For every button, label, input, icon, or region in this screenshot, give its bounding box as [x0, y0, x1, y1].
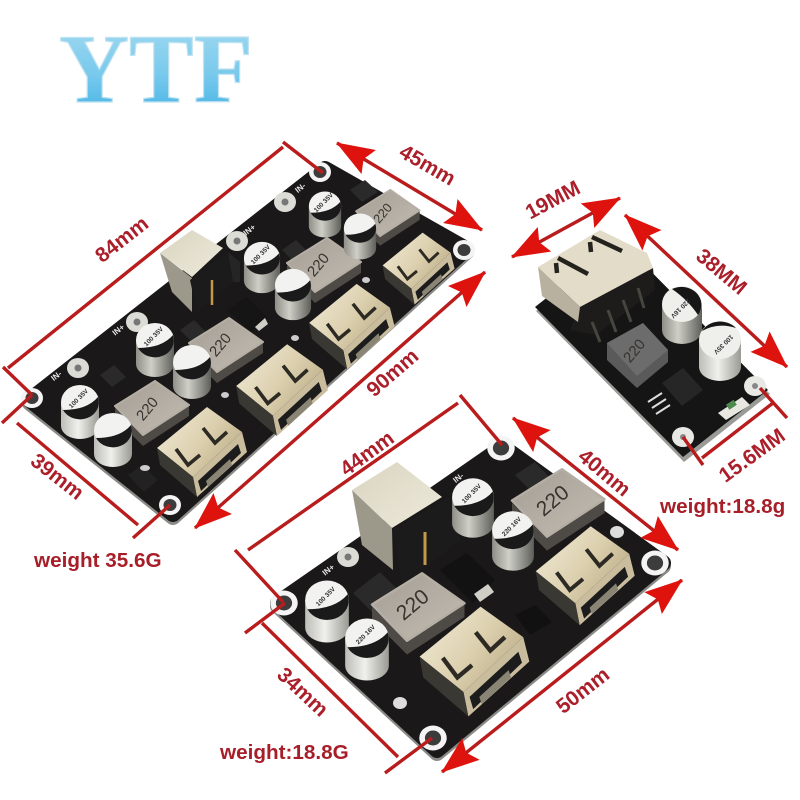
- capacitors: 100 35V: [461, 482, 483, 505]
- board: four-port 84x39 module: IN+: [242, 222, 257, 237]
- dimensions: 45mm arrow: 45mm: [395, 140, 459, 191]
- dimensions: 38MM arrow: 38MM: [691, 244, 751, 300]
- board: four-port 84x39 module: [21, 162, 475, 517]
- weight label: large board: weight 35.6G: [33, 549, 162, 572]
- capacitors: 220 16V: [501, 515, 523, 538]
- dimensions: 50mm arrow: 50mm: [552, 663, 614, 719]
- capacitors: 100 35V: [250, 243, 272, 266]
- dimensions: 84mm: [3, 142, 323, 395]
- board: two-port 44x34 module: [270, 436, 669, 753]
- board: four-port 84x39 module: IN-: [293, 181, 308, 195]
- USB ports: [157, 233, 455, 497]
- capacitors: 100 35V: [712, 333, 734, 356]
- dimensions: 40mm arrow: 40mm: [574, 445, 635, 501]
- dimensions: 39mm: [2, 395, 170, 538]
- dimensions: 44mm: [235, 395, 502, 602]
- capacitors: 100 35V: [143, 325, 165, 348]
- weight label: two-port board: weight:18.8G: [219, 741, 349, 764]
- capacitors: 220 16V: [669, 297, 691, 320]
- capacitors: 100 35V: [68, 387, 90, 410]
- inductor: [607, 323, 668, 388]
- inductors: 220: [133, 394, 162, 424]
- USB port: [538, 230, 655, 342]
- inductor: 220: [620, 336, 649, 366]
- dimensions: 34mm: 34mm: [272, 663, 332, 721]
- capacitors: 100 35V: [315, 585, 337, 608]
- dimensions: 90mm arrow: [195, 272, 485, 528]
- inductors: 220: [532, 481, 574, 521]
- board: four-port 84x39 module: IN-: [49, 369, 64, 383]
- capacitors: 100 35V: [313, 191, 335, 214]
- inductors: [372, 469, 604, 654]
- USB ports: [420, 526, 635, 716]
- dimensions: 19MM arrow: [512, 176, 620, 257]
- inductors: 220: [392, 585, 434, 625]
- weight label: single-port board: weight:18.8g: [659, 495, 785, 518]
- chips and LEDs: [100, 180, 378, 492]
- dimensions: 84mm: 84mm: [91, 212, 153, 268]
- inductors: 220: [304, 250, 333, 280]
- capacitors: [662, 286, 741, 381]
- capacitors: [61, 191, 376, 467]
- MOSFET and chips: [353, 462, 624, 709]
- chip and LED: [648, 368, 750, 420]
- dimensions: 90mm arrow: 90mm: [362, 345, 423, 402]
- inductors: 220: [206, 330, 235, 360]
- dimensions: 40mm arrow: [513, 418, 678, 550]
- dimensions: 38MM arrow: [625, 215, 787, 367]
- dimensions: 44mm: 44mm: [336, 427, 398, 481]
- DC jack: [352, 462, 460, 587]
- inductors: [115, 190, 420, 446]
- dimensions: 34mm: [245, 603, 432, 773]
- inductors: 220: [370, 200, 395, 226]
- dimensions: 19MM arrow: 19MM: [522, 176, 584, 224]
- board: single-port 38x19 module: [535, 230, 770, 462]
- dimensions: 15.6MM: [683, 388, 790, 487]
- board: two-port 44x34 module: IN+: [321, 562, 336, 577]
- dimensions: 45mm arrow: [337, 140, 482, 230]
- board: two-port 44x34 module: IN-: [451, 471, 466, 485]
- logo: YTF: YTF: [59, 15, 253, 124]
- capacitors: [305, 478, 534, 681]
- dimensions: 15.6MM: 15.6MM: [715, 424, 790, 487]
- dimensions: 39mm: 39mm: [26, 449, 88, 505]
- DC jack: [160, 230, 268, 332]
- dimensions: 50mm arrow: [442, 580, 682, 772]
- capacitors: 220 16V: [355, 623, 377, 646]
- board: four-port 84x39 module: IN+: [111, 322, 126, 337]
